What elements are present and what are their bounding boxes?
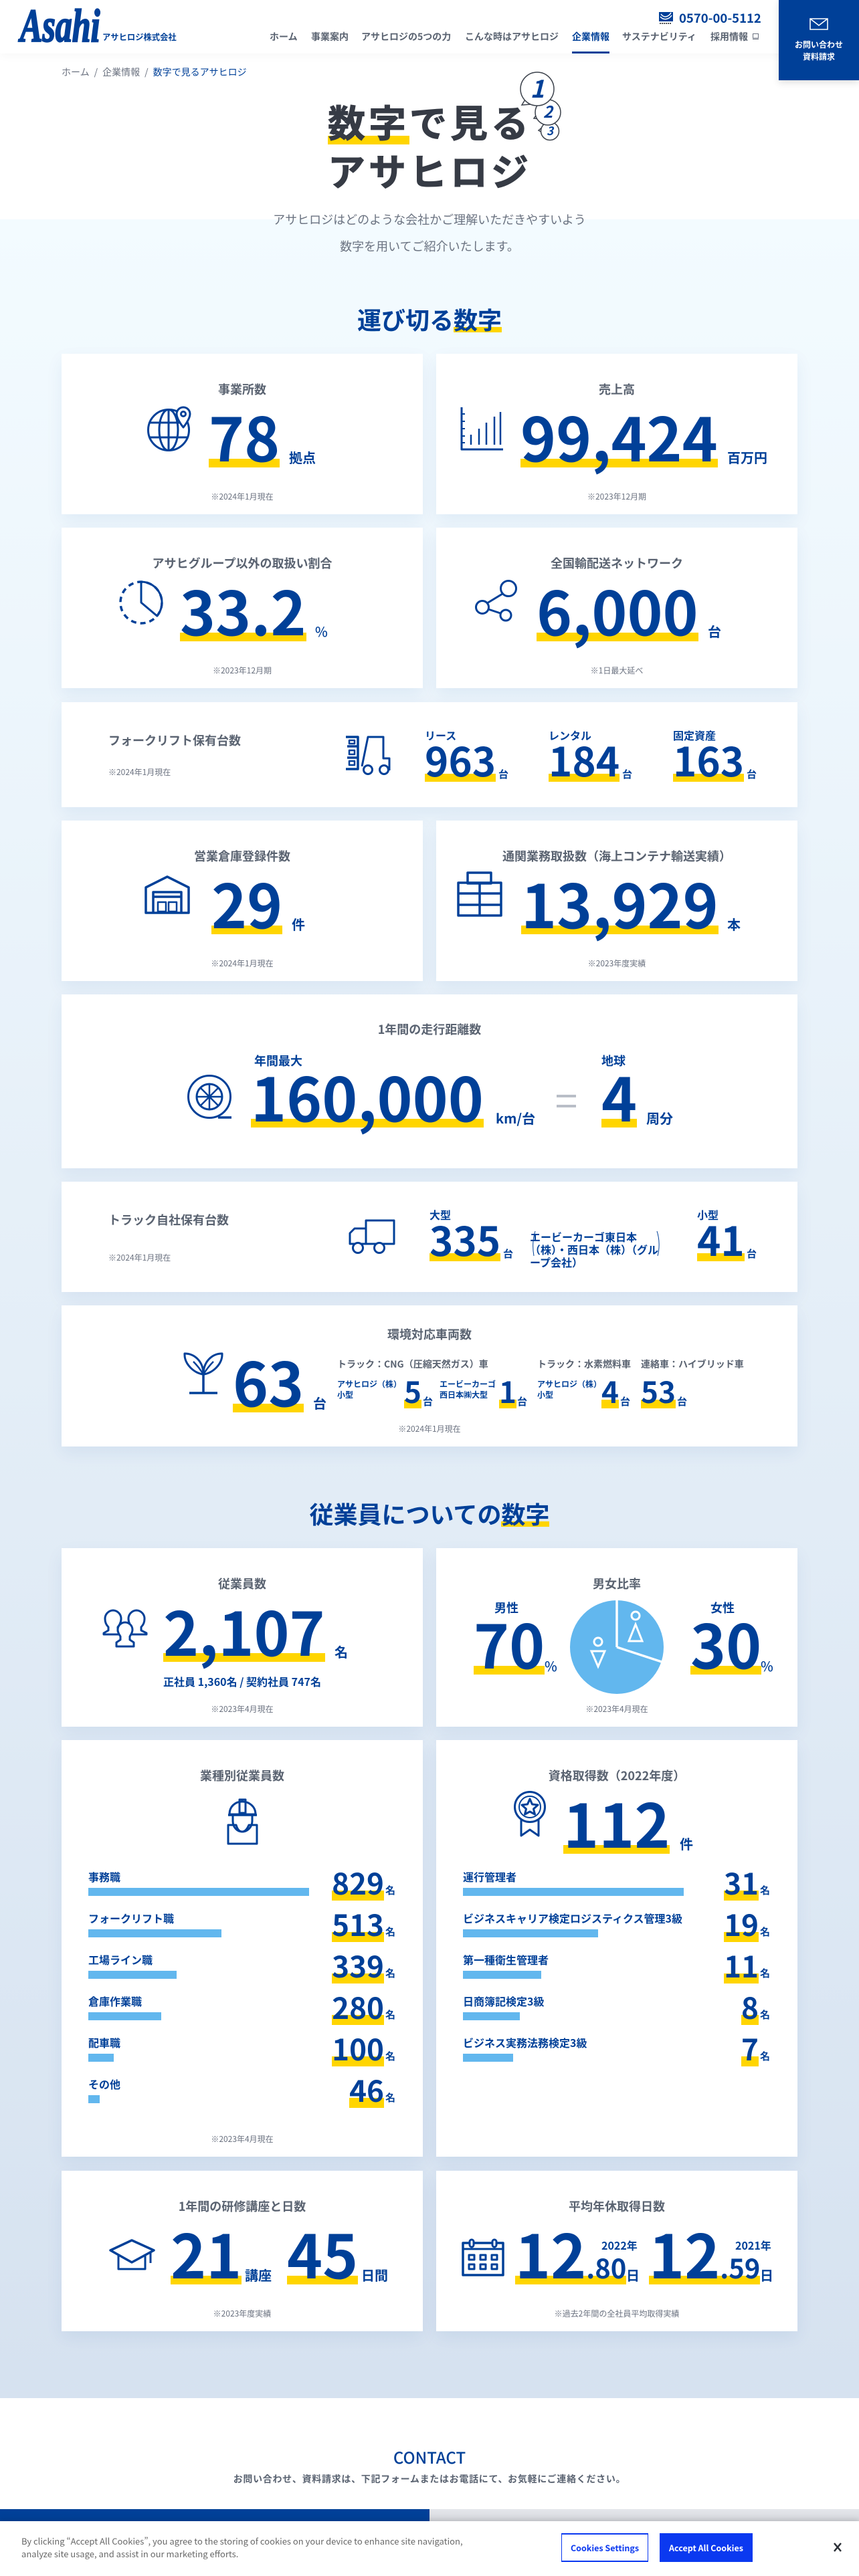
label: asahi logi small hydrogen: アサヒロジ（株） <box>537 1378 601 1390</box>
nav: five powers: アサヒロジの5つの力 <box>361 30 451 43</box>
unit: 日間 <box>361 2265 388 2284</box>
hero title <box>328 94 532 197</box>
bar <box>88 2095 100 2103</box>
number: 19 <box>724 1902 759 1945</box>
cta text <box>795 39 843 62</box>
panel: employees by job <box>62 1740 423 2157</box>
unit: km: km/台 <box>496 1108 535 1128</box>
note: ※2024年1月現在 <box>398 1423 461 1434</box>
icon: mail <box>809 18 828 30</box>
unit: 名 <box>385 2008 395 2022</box>
row: business law <box>463 2026 770 2069</box>
icon: numbered speech bubbles <box>520 70 561 140</box>
icon: forklift <box>346 736 391 775</box>
number: courses: 21 <box>171 2209 242 2296</box>
nav: sustainability: サステナビリティ <box>622 30 696 43</box>
row: warehouse <box>88 1985 395 2028</box>
bubble 2: 2 <box>543 99 555 122</box>
heading: 平均年休取得日数 <box>569 2197 665 2215</box>
label: lease: リース <box>425 727 456 743</box>
label: その他 <box>88 2076 120 2092</box>
company name: アサヒロジ株式会社 <box>102 31 177 43</box>
unit: laps: 周分 <box>646 1108 673 1128</box>
label: fixed assets: 固定資産 <box>673 727 716 743</box>
icon: worker <box>227 1799 258 1844</box>
intro text: 数字を用いてご紹介いたします。 <box>340 237 519 255</box>
heading: アサヒグループ以外の取扱い割合 <box>153 554 332 572</box>
hero title: アサヒロジ <box>328 143 532 197</box>
icon: sprout <box>183 1352 223 1394</box>
label: female: 女性 <box>710 1599 735 1616</box>
number: male: 70 <box>474 1599 545 1686</box>
pie chart <box>570 1600 664 1694</box>
number: lease: 963 <box>425 730 496 788</box>
unit: 名 <box>760 1966 770 1980</box>
unit: 名 <box>385 1883 395 1897</box>
heading: トラック自社保有台数 <box>108 1211 229 1228</box>
button: cookies settings: Cookies Settings <box>571 2541 639 2554</box>
contact heading: CONTACT <box>393 2445 466 2468</box>
panel: employees <box>62 1548 423 1727</box>
number: 829 <box>332 1860 384 1903</box>
unit: % <box>545 1656 557 1675</box>
footer contact section <box>0 2398 859 2576</box>
number: 4 <box>601 1369 619 1412</box>
unit: 台 <box>622 767 632 781</box>
panel: offices <box>62 354 423 514</box>
number: 33.2 <box>180 566 306 653</box>
unit: 台 <box>677 1394 687 1408</box>
icon: calendar <box>462 2239 504 2276</box>
note: ※2024年1月現在 <box>108 1252 171 1263</box>
heading: 通関業務取扱数（海上コンテナ輸送実績） <box>502 847 731 865</box>
label: 配車職 <box>88 2034 120 2050</box>
number: small: 41 <box>697 1210 745 1268</box>
number: 280 <box>332 1985 384 2028</box>
intro text <box>273 211 586 255</box>
cta text: お問い合わせ <box>795 39 843 50</box>
unit: 名 <box>760 1883 770 1897</box>
nav: business: 事業案内 <box>311 30 349 43</box>
bar <box>463 2012 520 2020</box>
number: 29 <box>211 859 282 946</box>
bar <box>88 1971 177 1979</box>
group company text <box>530 1228 658 1270</box>
group company text: （株）・西日本（株）（グル <box>530 1241 658 1257</box>
panel: eco vehicles <box>62 1305 797 1446</box>
number: 112 <box>563 1778 670 1865</box>
nav: active underline <box>572 51 609 53</box>
contact text: お問い合わせ、資料請求は、下記フォームまたはお電話にて、お気軽にご連絡ください。 <box>233 2472 626 2486</box>
number: 513 <box>332 1902 384 1945</box>
heading: 資格取得数（2022年度） <box>549 1767 685 1784</box>
unit: 件 <box>292 914 305 934</box>
number: 99,424 <box>520 392 718 479</box>
icon: warehouse <box>145 875 190 914</box>
heading: 売上高 <box>599 381 635 398</box>
heading: 営業倉庫登録件数 <box>194 847 290 865</box>
heading: 従業員数 <box>218 1575 266 1592</box>
note: ※2024年1月現在 <box>108 766 171 778</box>
group company text: エービーカーゴ東日本 <box>530 1228 637 1245</box>
contact call to action <box>779 0 859 80</box>
unit: 拠点 <box>289 447 316 467</box>
number: 78 <box>209 392 280 479</box>
nav: when: こんな時はアサヒロジ <box>465 30 559 43</box>
close icon <box>834 2543 842 2551</box>
label: asahi logi small hydrogen: 小型 <box>537 1389 553 1400</box>
unit: % <box>315 621 328 641</box>
button: accept all: Accept All Cookies <box>669 2541 743 2554</box>
logo: Asahi: Asahi <box>20 0 100 51</box>
heading: フォークリフト保有台数 <box>108 732 241 749</box>
label: AB cargo: エービーカーゴ <box>440 1378 496 1390</box>
header <box>0 0 859 53</box>
icon: dashed pie <box>119 580 163 625</box>
icon: share nodes <box>475 580 517 622</box>
number: 5 <box>404 1369 421 1412</box>
note: ※2023年12月期 <box>213 665 272 676</box>
label: AB cargo: 西日本㈱大型 <box>440 1389 488 1400</box>
unit: 台 <box>423 1394 433 1408</box>
unit: 台 <box>708 621 721 641</box>
note: ※1日最大延べ <box>591 665 643 676</box>
subheading: CNG: トラック：CNG（圧縮天然ガス）車 <box>337 1358 488 1371</box>
breadcrumb: ホーム / 企業情報 / 数字で見るアサヒロジ <box>62 66 247 79</box>
icon: external link <box>753 33 759 39</box>
icon: graduation cap <box>109 2239 155 2270</box>
label: asahi logi small CNG: 小型 <box>337 1389 353 1400</box>
panel: paid leave <box>436 2171 797 2331</box>
heading: 事業所数 <box>218 381 266 398</box>
section heading: transport numbers <box>357 302 502 336</box>
panel: gender ratio <box>436 1548 797 1727</box>
unit: 名 <box>385 2090 395 2105</box>
icon: bar chart <box>460 407 503 451</box>
panel: customs handling <box>436 821 797 981</box>
bar <box>88 2054 114 2062</box>
number: 46 <box>349 2068 384 2111</box>
number: 7 <box>741 2026 759 2069</box>
row: factory line <box>88 1943 395 1986</box>
row: operations manager <box>463 1860 770 1903</box>
number: 6,000 <box>537 566 698 653</box>
unit: 台 <box>747 1247 757 1261</box>
label: 日商簿記検定3級 <box>463 1993 544 2009</box>
row: dispatch <box>88 2026 395 2069</box>
section heading: transport numbers: 運び切る <box>357 302 454 336</box>
tall parentheses <box>533 1230 660 1256</box>
unit: % <box>761 1656 773 1675</box>
number: 8 <box>741 1985 759 2028</box>
label: asahi logi small hydrogen <box>537 1378 601 1400</box>
unit: 台 <box>620 1394 630 1408</box>
label: max per year: 年間最大 <box>254 1052 302 1069</box>
bar <box>88 1929 221 1937</box>
label: フォークリフト職 <box>88 1910 174 1926</box>
group company text: ープ会社） <box>530 1254 583 1270</box>
nav: recruit: 採用情報 <box>710 30 748 43</box>
icon: containers <box>457 871 502 917</box>
hero title: で見る <box>409 94 532 148</box>
note: ※2023年12月期 <box>587 491 646 502</box>
number: 100 <box>332 2026 384 2069</box>
bar <box>88 1888 309 1896</box>
panel: annual mileage <box>62 994 797 1168</box>
panel: forklifts <box>62 702 797 807</box>
note: ※2023年4月現在 <box>211 1703 274 1715</box>
label: male: 男性 <box>494 1599 518 1616</box>
unit: 名 <box>760 2008 770 2022</box>
subheading: hybrid: 連絡車：ハイブリッド車 <box>641 1358 744 1371</box>
unit: 百万円 <box>727 447 767 467</box>
button: cookies settings <box>561 2533 648 2562</box>
icon: male symbol <box>591 1638 605 1667</box>
label: 事務職 <box>88 1868 120 1885</box>
phone number: 0570-00-5112 <box>679 9 761 27</box>
unit: 日 <box>760 2265 773 2284</box>
unit: 名 <box>760 2049 770 2063</box>
number: total: 63 <box>233 1337 304 1424</box>
label: large: 大型 <box>430 1206 451 1222</box>
bar <box>463 1971 541 1979</box>
row: bookkeeping <box>463 1985 770 2028</box>
note: ※2024年1月現在 <box>211 491 274 502</box>
row: logistics certificate <box>463 1902 770 1945</box>
equals sign <box>557 1095 576 1107</box>
cookie text: analyze site usage, and assist in our marketing efforts. <box>21 2547 238 2560</box>
cta text: 資料請求 <box>803 51 835 62</box>
note: ※過去2年間の全社員平均取得実績 <box>555 2308 679 2319</box>
bar <box>463 1888 684 1896</box>
number: 1 <box>499 1369 516 1412</box>
number: fixed assets: 163 <box>673 730 744 788</box>
label: 第一種衛生管理者 <box>463 1951 549 1967</box>
note: ※2023年度実績 <box>588 958 646 969</box>
breakdown: 正社員 1,360名 / 契約社員 747名 <box>163 1673 321 1689</box>
unit: 台 <box>498 767 508 781</box>
heading: 業種別従業員数 <box>200 1767 284 1784</box>
heading: 男女比率 <box>593 1575 641 1592</box>
row: office <box>88 1860 395 1903</box>
number: female: 30 <box>690 1599 761 1686</box>
unit: 名 <box>385 2049 395 2063</box>
note: ※2024年1月現在 <box>211 958 274 969</box>
panel: qualifications <box>436 1740 797 2157</box>
subheading: hydrogen: トラック：水素燃料車 <box>537 1358 631 1371</box>
label: ビジネス実務法務検定3級 <box>463 2034 587 2050</box>
nav: home: ホーム <box>270 30 298 43</box>
label: 倉庫作業職 <box>88 1993 142 2009</box>
bubble 3: 3 <box>547 122 555 138</box>
icon: tire <box>187 1075 231 1119</box>
cookie text <box>21 2535 463 2560</box>
nav: company (active): 企業情報 <box>572 30 609 43</box>
unit: 台 <box>747 767 757 781</box>
unit: 本 <box>727 914 741 934</box>
unit: 名 <box>385 1925 395 1939</box>
bar <box>88 2012 161 2020</box>
panel: sales <box>436 354 797 514</box>
note: ※2023年4月現在 <box>585 1703 648 1715</box>
icon: globe with pin <box>147 407 191 451</box>
icon: people <box>103 1609 147 1648</box>
number: large: 335 <box>430 1210 500 1268</box>
label: ビジネスキャリア検定ロジスティクス管理3級 <box>463 1910 682 1926</box>
number: 339 <box>332 1943 384 1986</box>
label: asahi logi small CNG <box>337 1378 401 1400</box>
bubble 1: 1 <box>530 70 545 105</box>
hero title: 数字 <box>328 94 409 148</box>
bar <box>463 1929 598 1937</box>
unit: 名 <box>335 1642 348 1661</box>
icon: truck <box>349 1220 395 1254</box>
intro text: アサヒロジはどのような会社かご理解いただきやすいよう <box>273 211 586 228</box>
section heading: employee numbers: 数字 <box>501 1496 549 1531</box>
label: rental: レンタル <box>549 727 591 743</box>
heading: 1年間の走行距離数 <box>378 1021 481 1038</box>
number: laps: 4 <box>601 1052 637 1139</box>
contact bar: blue <box>0 2509 430 2521</box>
panel: non-group share <box>62 528 423 688</box>
unit: 台 <box>517 1394 527 1408</box>
number: 2,107 <box>163 1586 325 1673</box>
number: hybrid: 53 <box>641 1369 676 1412</box>
unit: 名 <box>385 1966 395 1980</box>
unit: 台 <box>503 1247 513 1261</box>
number: 31 <box>724 1860 759 1903</box>
unit: 件 <box>680 1834 693 1853</box>
unit: 日 <box>626 2265 640 2284</box>
row: health manager <box>463 1943 770 1986</box>
panel: delivery network <box>436 528 797 688</box>
icon: medal <box>514 1791 546 1837</box>
panel: trucks <box>62 1182 797 1292</box>
bar <box>463 2054 513 2062</box>
label: AB cargo <box>440 1378 496 1400</box>
contact bar: grey <box>430 2509 859 2521</box>
icon: navi dial <box>659 12 673 24</box>
heading: 1年間の研修講座と日数 <box>179 2197 306 2215</box>
number: rental: 184 <box>549 730 619 788</box>
label: 運行管理者 <box>463 1868 516 1885</box>
label: 工場ライン職 <box>88 1951 153 1967</box>
row: forklift <box>88 1902 395 1945</box>
heading: 全国輸配送ネットワーク <box>551 554 683 572</box>
number: km: 160,000 <box>251 1052 484 1139</box>
button: accept all <box>660 2533 753 2562</box>
panel: training <box>62 2171 423 2331</box>
panel: warehouse registrations <box>62 821 423 981</box>
number: 11 <box>724 1943 759 1986</box>
row: other <box>88 2068 395 2111</box>
label: earth: 地球 <box>601 1052 626 1069</box>
section heading: employee numbers: 従業員についての <box>310 1496 501 1531</box>
label: 2022: 2022年 <box>601 2237 638 2253</box>
number: days: 45 <box>287 2209 358 2296</box>
note: ※2023年4月現在 <box>211 2133 274 2145</box>
number: 2022: 12.80 <box>515 2209 626 2296</box>
heading: 環境対応車両数 <box>387 1325 472 1343</box>
unit: 台 <box>313 1393 326 1412</box>
cookie banner <box>0 2521 859 2576</box>
number: 2021: 12.59 <box>649 2209 760 2296</box>
label: 2021: 2021年 <box>735 2237 771 2253</box>
unit: 名 <box>760 1925 770 1939</box>
section heading: transport numbers: 数字 <box>454 302 502 336</box>
label: asahi logi small CNG: アサヒロジ（株） <box>337 1378 401 1390</box>
note: ※2023年度実績 <box>213 2308 271 2319</box>
number: 13,929 <box>521 859 719 946</box>
label: small: 小型 <box>697 1206 719 1222</box>
cookie text: By clicking “Accept All Cookies”, you agree to the storing of cookies on your device to enhance site navigation, <box>21 2535 463 2547</box>
unit: 講座 <box>245 2265 272 2284</box>
icon: female symbol <box>629 1612 642 1641</box>
